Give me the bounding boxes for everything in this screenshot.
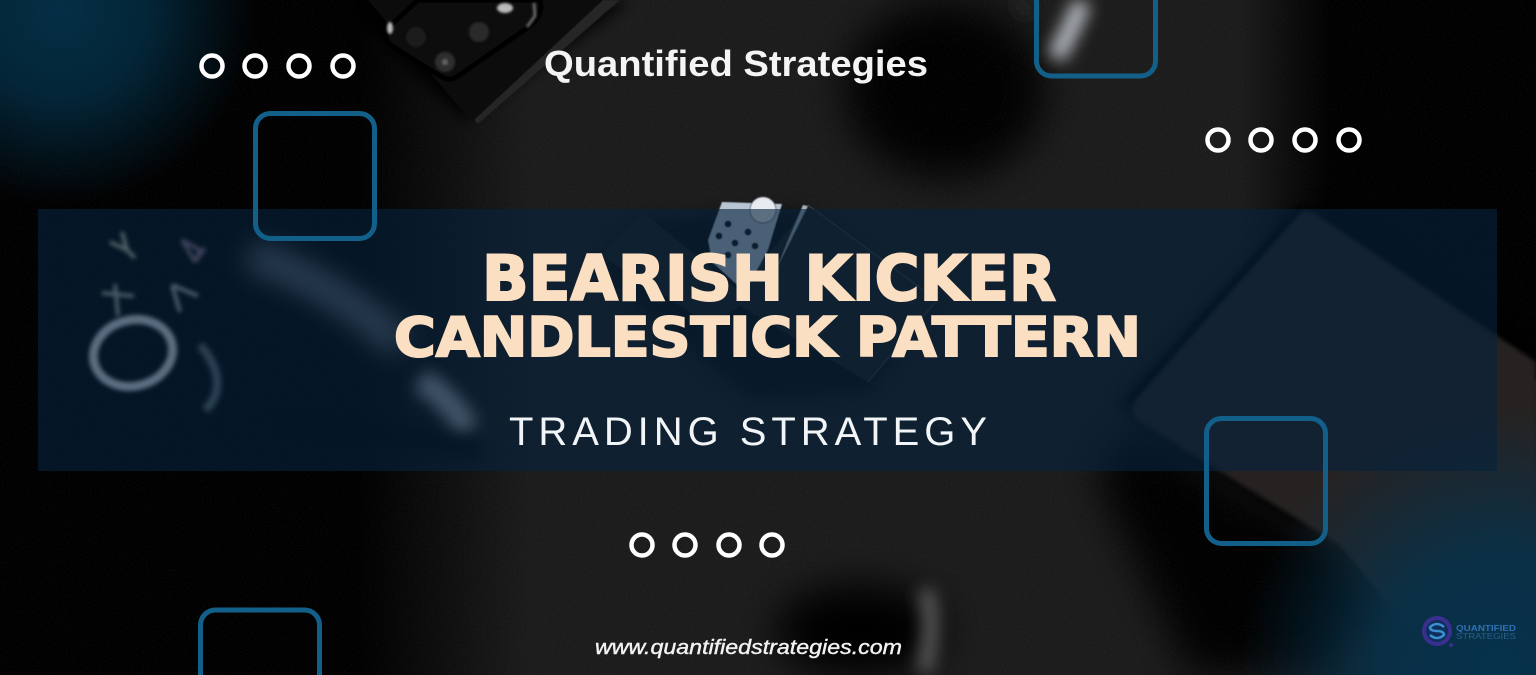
decorative outlined square: upper left [256,114,374,238]
logo: Quantified Strategies [1424,618,1516,647]
photo object: power bank [1116,205,1536,640]
decorative outlined square: right [1206,418,1326,544]
blue glow bottom right [1230,410,1536,675]
photo object: lighter [590,197,937,400]
title line 2: CANDLESTICK PATTERN [394,306,1141,369]
translucent title band [38,209,1497,471]
logo emblem [1424,618,1453,647]
photo object: top round object highlight [1010,2,1082,58]
ring dots: top left [202,56,354,76]
title line 1: BEARISH KICKER [482,242,1056,315]
photo object: controller button letters [102,232,205,316]
phone camera island [386,0,541,79]
decorative outlined square: top [1036,0,1156,76]
website url: www.quantifiedstrategies.com [595,637,902,659]
lighter chimney [708,197,808,292]
brand heading: Quantified Strategies [544,43,928,84]
photo object: earbud bottom center [775,585,945,675]
subtitle: TRADING STRATEGY [509,410,987,454]
blue glow top left [0,0,260,210]
logo wordmark top: QUANTIFIED [1456,623,1516,633]
ring dots: top right [1208,130,1360,150]
decorative outlined square: bottom left [200,610,320,675]
ring dots: bottom center [632,534,782,556]
photo object: phone [340,0,630,124]
photo object: game controller [86,255,480,450]
logo wordmark bottom: STRATEGIES [1456,631,1516,641]
